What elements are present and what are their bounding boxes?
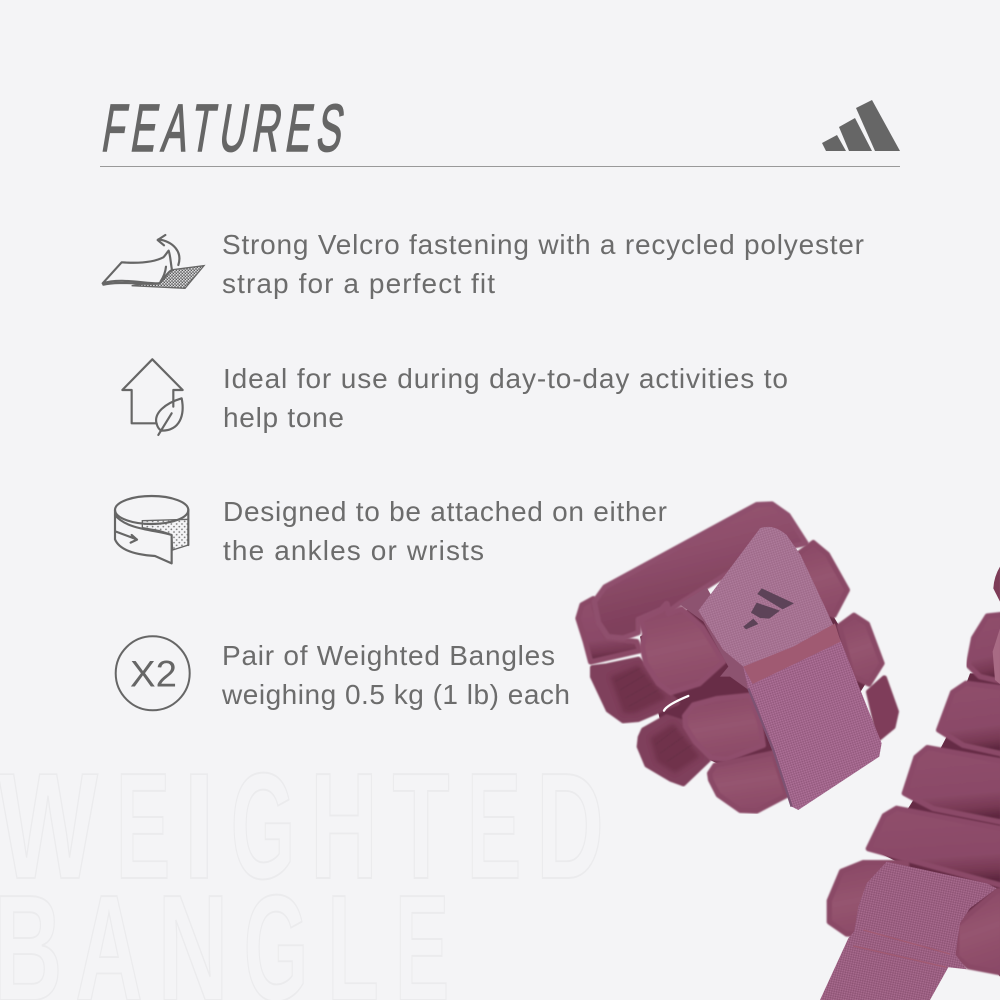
sub-element: front block one xyxy=(641,604,724,693)
watermark: weighted bangle outlined text: H xyxy=(310,741,378,910)
text: day to day feature: Ideal for use during day-to-day activities to xyxy=(223,363,788,394)
sub-element: strap fold edge xyxy=(679,587,753,693)
icon: house with leaf xyxy=(122,359,183,435)
sub-element: left back block xyxy=(578,599,640,662)
text: ankles or wrists feature: Designed to be attached on either xyxy=(223,496,667,527)
watermark: weighted bangle outlined text: W xyxy=(0,741,98,910)
sub-element: lower strap xyxy=(820,928,967,1000)
watermark: weighted bangle outlined text: E xyxy=(116,741,170,910)
icon: x2 badge xyxy=(116,636,190,710)
watermark: weighted bangle outlined text: G xyxy=(231,742,295,910)
watermark: weighted bangle outlined text: T xyxy=(392,741,450,910)
sub-element: ribbed middle block xyxy=(593,659,677,721)
watermark: weighted bangle outlined text: D xyxy=(536,741,604,910)
sub-element: block a xyxy=(968,614,1000,682)
sub-element: strap seam xyxy=(853,930,950,967)
sub-element: strap loop xyxy=(853,862,997,958)
product: open bangle xyxy=(820,567,1000,1000)
sub-element: dark body silhouette xyxy=(640,550,870,800)
sub-element: ribbed lower block xyxy=(639,717,708,784)
sub-element: metal hook xyxy=(664,696,688,711)
sub-element: right blocks xyxy=(796,543,896,738)
text: pair feature: weighing 0.5 kg (1 lb) each xyxy=(221,679,570,710)
sub-element: dark underlay xyxy=(880,673,1000,977)
text: day to day feature: help tone xyxy=(223,402,344,433)
title: FEATURES xyxy=(98,90,350,166)
sub-element: block d xyxy=(868,808,1000,886)
header rule xyxy=(100,166,900,168)
sub-element: bottom block xyxy=(710,753,787,811)
sub-element: stitching xyxy=(743,623,841,684)
text: velcro feature: Strong Velcro fastening with a recycled polyester xyxy=(222,229,864,260)
sub-element: front block two xyxy=(685,695,763,759)
text: ankles or wrists feature: the ankles or wrists xyxy=(223,535,484,566)
watermark: weighted bangle outlined text: I xyxy=(183,743,215,911)
sub-element: block e right end xyxy=(957,891,1000,973)
watermark: weighted bangle outlined text xyxy=(0,741,604,1000)
icon: strap band xyxy=(115,496,188,563)
text: velcro feature: strap for a perfect fit xyxy=(222,268,495,299)
sub-element: block c xyxy=(904,748,1000,823)
text: ankles or wrists feature xyxy=(223,496,667,566)
product: folded bangle xyxy=(578,504,896,811)
icon: adidas logo xyxy=(822,100,900,151)
sub-element: strap logo xyxy=(743,588,794,629)
sub-element: top block xyxy=(993,567,1000,602)
sub-element: block e xyxy=(829,863,907,937)
sub-element: upper strap xyxy=(698,527,841,667)
icon: velcro fabric xyxy=(103,235,204,288)
sub-element: lower strap xyxy=(743,641,882,810)
sub-element: block b xyxy=(939,683,1000,754)
text: pair feature xyxy=(221,640,570,710)
watermark: weighted bangle outlined text: E xyxy=(467,741,521,910)
text: velcro feature xyxy=(222,229,864,299)
text: day to day feature xyxy=(223,363,788,433)
sub-element: top long block xyxy=(594,504,806,638)
sub-element: block a strap xyxy=(993,628,1000,684)
sub-element: lower strap edge xyxy=(748,688,792,807)
text: pair feature: Pair of Weighted Bangles xyxy=(222,640,555,671)
icon: x2 badge: X2 xyxy=(130,654,177,694)
